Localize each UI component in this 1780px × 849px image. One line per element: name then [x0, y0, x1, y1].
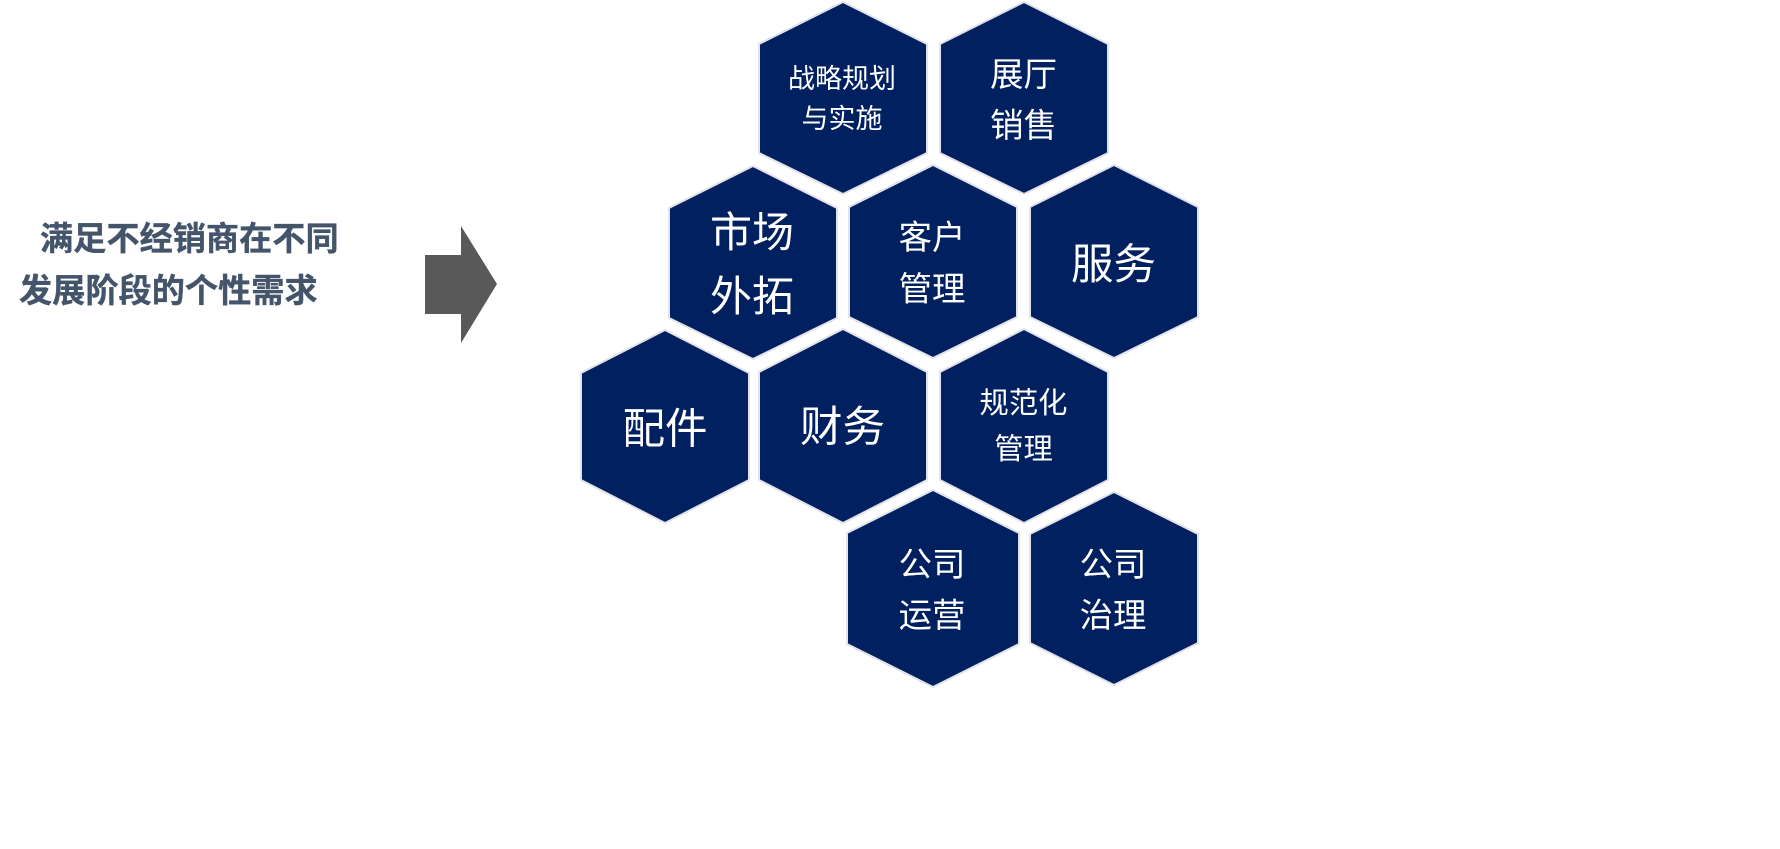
hexagon: customer management [849, 165, 1017, 358]
hexagon: finance [759, 329, 927, 523]
hexagon: market expansion: 市场 [710, 209, 794, 256]
hexagon: corporate governance: 公司 [1080, 547, 1146, 584]
hexagon: service: 服务 [1071, 242, 1156, 289]
hexagon: finance: 财务 [800, 404, 885, 452]
hexagon: service [1030, 165, 1198, 358]
hexagon: strategy planning [759, 2, 927, 194]
hexagon: showroom sales: 销售 [990, 108, 1057, 145]
hexagon: customer management: 客户 [899, 220, 965, 257]
hexagon: company operations: 运营 [899, 598, 965, 635]
heading text: customer need statement [19, 221, 339, 310]
heading text: customer need statement: 满足不经销商在不同 [40, 221, 339, 258]
heading text: customer need statement: 发展阶段的个性需求 [19, 273, 318, 310]
hexagon: corporate governance [1030, 492, 1198, 685]
hexagon: showroom sales: 展厅 [990, 57, 1057, 94]
hexagon: corporate governance: 治理 [1080, 598, 1146, 635]
hexagon: parts: 配件 [622, 406, 708, 454]
hexagon: showroom sales [940, 2, 1108, 194]
hexagon: strategy planning: 战略规划 [788, 64, 896, 94]
hexagon: company operations [847, 490, 1019, 687]
arrow pointing right [425, 226, 497, 343]
hexagon: market expansion [669, 166, 837, 359]
hexagon: parts [581, 330, 749, 523]
hexagon: company operations: 公司 [899, 547, 965, 584]
hexagon: standardized management [940, 329, 1108, 523]
hexagon: standardized management: 管理 [994, 433, 1053, 466]
hexagon: customer management: 管理 [899, 272, 965, 308]
hexagon: strategy planning: 与实施 [802, 104, 882, 134]
hexagon: market expansion: 外拓 [710, 273, 794, 320]
hexagon: standardized management: 规范化 [980, 387, 1067, 420]
